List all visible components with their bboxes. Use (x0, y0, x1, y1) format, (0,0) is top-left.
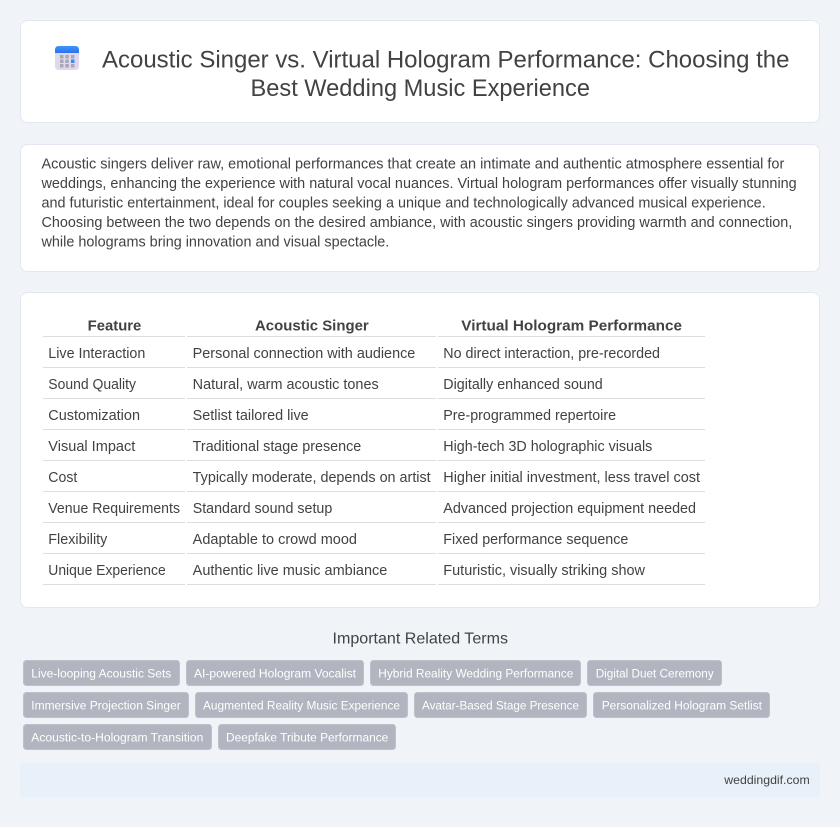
table header: Acoustic Singer (255, 319, 369, 335)
table row: Customization (43, 408, 705, 430)
table row: Sound Quality (43, 377, 705, 399)
tag: Personalized Hologram Setlist (594, 692, 770, 718)
table row: Customization: Pre-programmed repertoire (443, 408, 616, 424)
tag: Live-looping Acoustic Sets (24, 660, 180, 686)
table row: Flexibility: Fixed performance sequence (443, 532, 628, 548)
heading: important related terms: Important Related Terms (332, 630, 508, 647)
table row: Flexibility: Flexibility (48, 532, 108, 548)
table row: Cost: Cost (48, 470, 77, 486)
title (102, 46, 790, 102)
table row: Sound Quality: Digitally enhanced sound (443, 377, 603, 393)
tag: Hybrid Reality Wedding Performance (370, 660, 580, 686)
tag: Avatar-Based Stage Presence (414, 692, 586, 718)
table row: Cost: Higher initial investment, less travel cost (443, 470, 700, 486)
footer (20, 763, 820, 797)
table row: Venue Requirements (43, 501, 705, 523)
table row: Flexibility: Adaptable to crowd mood (193, 532, 357, 548)
tag: Acoustic-to-Hologram Transition (24, 724, 212, 750)
table row: Live Interaction: No direct interaction, pre-recorded (443, 346, 660, 362)
table row: Venue Requirements: Advanced projection equipment needed (443, 501, 696, 517)
tag: Avatar-Based Stage Presence: Avatar-Based Stage Presence (422, 698, 579, 712)
table row: Sound Quality: Sound Quality (48, 377, 137, 393)
text block: introduction paragraph: and futuristic entertainment, ideal for couples seeking a unique and technologically advanced musical experience. (42, 195, 766, 211)
table row: Visual Impact: Traditional stage presence (193, 439, 361, 455)
tag: Augmented Reality Music Experience: Augmented Reality Music Experience (203, 698, 400, 712)
tag: Immersive Projection Singer: Immersive Projection Singer (31, 698, 181, 712)
panel: related term tags (24, 660, 770, 750)
table row: Live Interaction: Personal connection with audience (193, 346, 415, 362)
text block: introduction paragraph (40, 156, 797, 250)
table row: Visual Impact: High-tech 3D holographic visuals (443, 439, 652, 455)
table row: Cost: Typically moderate, depends on artist (193, 470, 431, 486)
tag: Digital Duet Ceremony (588, 660, 722, 686)
footer text: site name: weddingdif.com (723, 773, 810, 787)
title: Best Wedding Music Experience (250, 75, 590, 102)
text block: introduction paragraph: Choosing between the two depends on the desired ambiance, with acoustic singers providing warmth and connection, (42, 215, 792, 231)
table row: Visual Impact (43, 439, 705, 461)
table row: Unique Experience: Authentic live music ambiance (193, 563, 387, 579)
tag: Deepfake Tribute Performance: Deepfake Tribute Performance (226, 730, 389, 744)
table header: Feature (88, 319, 141, 335)
title: Acoustic Singer vs. Virtual Hologram Performance: Choosing the (102, 46, 790, 74)
tag: Immersive Projection Singer (24, 692, 188, 718)
icon: calendar (55, 46, 79, 70)
text block: introduction paragraph: weddings, enhancing the experience with natural vocal nuances. Virtual hologram performances offer visually stunning (40, 176, 797, 192)
panel: title card (20, 20, 820, 122)
tag: AI-powered Hologram Vocalist (186, 660, 364, 686)
table row: Unique Experience: Futuristic, visually striking show (443, 563, 646, 579)
tag: Personalized Hologram Setlist: Personalized Hologram Setlist (602, 698, 763, 712)
table row: Sound Quality: Natural, warm acoustic tones (193, 377, 379, 393)
table header (43, 319, 705, 337)
table row: Venue Requirements: Standard sound setup (193, 501, 332, 517)
table row: Cost (43, 470, 705, 492)
panel: introduction (20, 144, 820, 272)
table row: Customization: Setlist tailored live (193, 408, 309, 424)
table row: Visual Impact: Visual Impact (48, 439, 135, 455)
tag: Digital Duet Ceremony: Digital Duet Ceremony (596, 666, 715, 680)
panel: comparison table (20, 292, 820, 608)
tag: AI-powered Hologram Vocalist: AI-powered Hologram Vocalist (194, 666, 357, 680)
table row: Live Interaction (43, 346, 705, 368)
table row: Unique Experience: Unique Experience (48, 563, 166, 579)
text block: introduction paragraph: Acoustic singers deliver raw, emotional performances that create an intimate and authentic atmosphere essential for (42, 156, 785, 172)
tag: Augmented Reality Music Experience (196, 692, 408, 718)
tag: Hybrid Reality Wedding Performance: Hybrid Reality Wedding Performance (378, 666, 574, 680)
tag: Acoustic-to-Hologram Transition: Acoustic-to-Hologram Transition (31, 730, 203, 744)
table row: Flexibility (43, 532, 705, 554)
table row: Live Interaction: Live Interaction (48, 346, 145, 362)
table header: Virtual Hologram Performance (461, 319, 682, 335)
text block: introduction paragraph: while holograms bring innovation and visual spectacle. (40, 234, 389, 250)
tag: Live-looping Acoustic Sets: Live-looping Acoustic Sets (31, 666, 171, 680)
tag: Deepfake Tribute Performance (218, 724, 396, 750)
table row: Customization: Customization (48, 408, 140, 424)
table row: Unique Experience (43, 563, 705, 585)
table row: Venue Requirements: Venue Requirements (48, 501, 180, 517)
